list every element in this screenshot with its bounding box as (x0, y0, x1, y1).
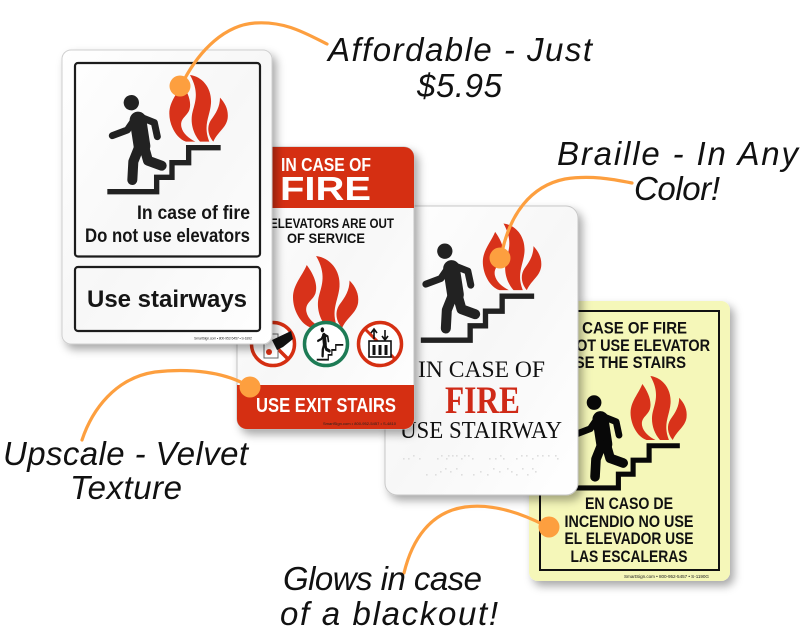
top red band (237, 147, 414, 208)
callout: glows: Glows in case (283, 560, 482, 597)
heading text: IN CASE OF (418, 357, 545, 382)
callout: braille: Braille - In Any (557, 135, 800, 172)
sign: red velvet (237, 147, 414, 429)
heading text: FIRE (445, 379, 520, 422)
subheading: ELEVATORS ARE OUT (270, 216, 395, 231)
callout: glows: of a blackout! (280, 595, 498, 632)
Spanish text: LAS ESCALERAS (570, 547, 688, 566)
sign: white standard (62, 50, 272, 344)
sign: white standard: Do not use elevators (85, 225, 250, 247)
upper frame (75, 63, 260, 256)
callout: affordable (170, 23, 594, 104)
callout: upscale (3, 371, 260, 506)
callout: affordable: Affordable - Just (326, 31, 594, 68)
icon: large flame (293, 256, 358, 328)
sign: braille (385, 206, 578, 495)
English text: USE THE STAIRS (564, 353, 686, 372)
callout: braille: Color! (634, 170, 720, 207)
icon: no elevator (358, 322, 402, 366)
icon: person on stairs with fire (421, 223, 541, 340)
heading text: USE STAIRWAY (400, 418, 562, 444)
heading: IN CASE OF (281, 154, 371, 175)
icon: person on stairs with fire (107, 75, 228, 192)
callout: glows (280, 506, 560, 632)
Spanish text: EL ELEVADOR USE (564, 529, 694, 548)
braille dots (403, 455, 559, 476)
icon: person on stairs with fire (571, 376, 687, 488)
heading text (400, 357, 562, 444)
warning text: In case of fire (137, 202, 250, 224)
callout: affordable: $5.95 (416, 67, 503, 104)
English text: IN CASE OF FIRE (563, 318, 687, 338)
fine print: SmartSign.com • 800-952-5457 • S-1190G (624, 574, 709, 579)
Spanish text: EN CASO DE (585, 494, 673, 513)
Spanish text (564, 494, 694, 566)
sign: glow in the dark (529, 301, 730, 581)
footer text: USE EXIT STAIRS (256, 395, 396, 417)
callout: braille (490, 135, 800, 268)
English text (540, 318, 710, 372)
fine print: SmartSign.com • 800-952-5457 • S-1892 (194, 336, 252, 340)
icon: no hand button (252, 322, 294, 366)
callout: upscale: Texture (70, 469, 182, 506)
use stairways text: Use stairways (87, 286, 247, 313)
bottom red band (237, 385, 414, 429)
sign: red velvet: FIRE (280, 171, 371, 208)
English text: DO NOT USE ELEVATOR (540, 336, 710, 355)
Spanish text: INCENDIO NO USE (564, 512, 694, 531)
callout: upscale: Upscale - Velvet (3, 435, 250, 472)
sign: red velvet: OF SERVICE (287, 231, 365, 246)
lower frame (75, 267, 260, 331)
fine print: SmartSign.com • 800-952-5457 • S-4810 (323, 421, 397, 426)
icon: green exit circle (304, 322, 348, 366)
